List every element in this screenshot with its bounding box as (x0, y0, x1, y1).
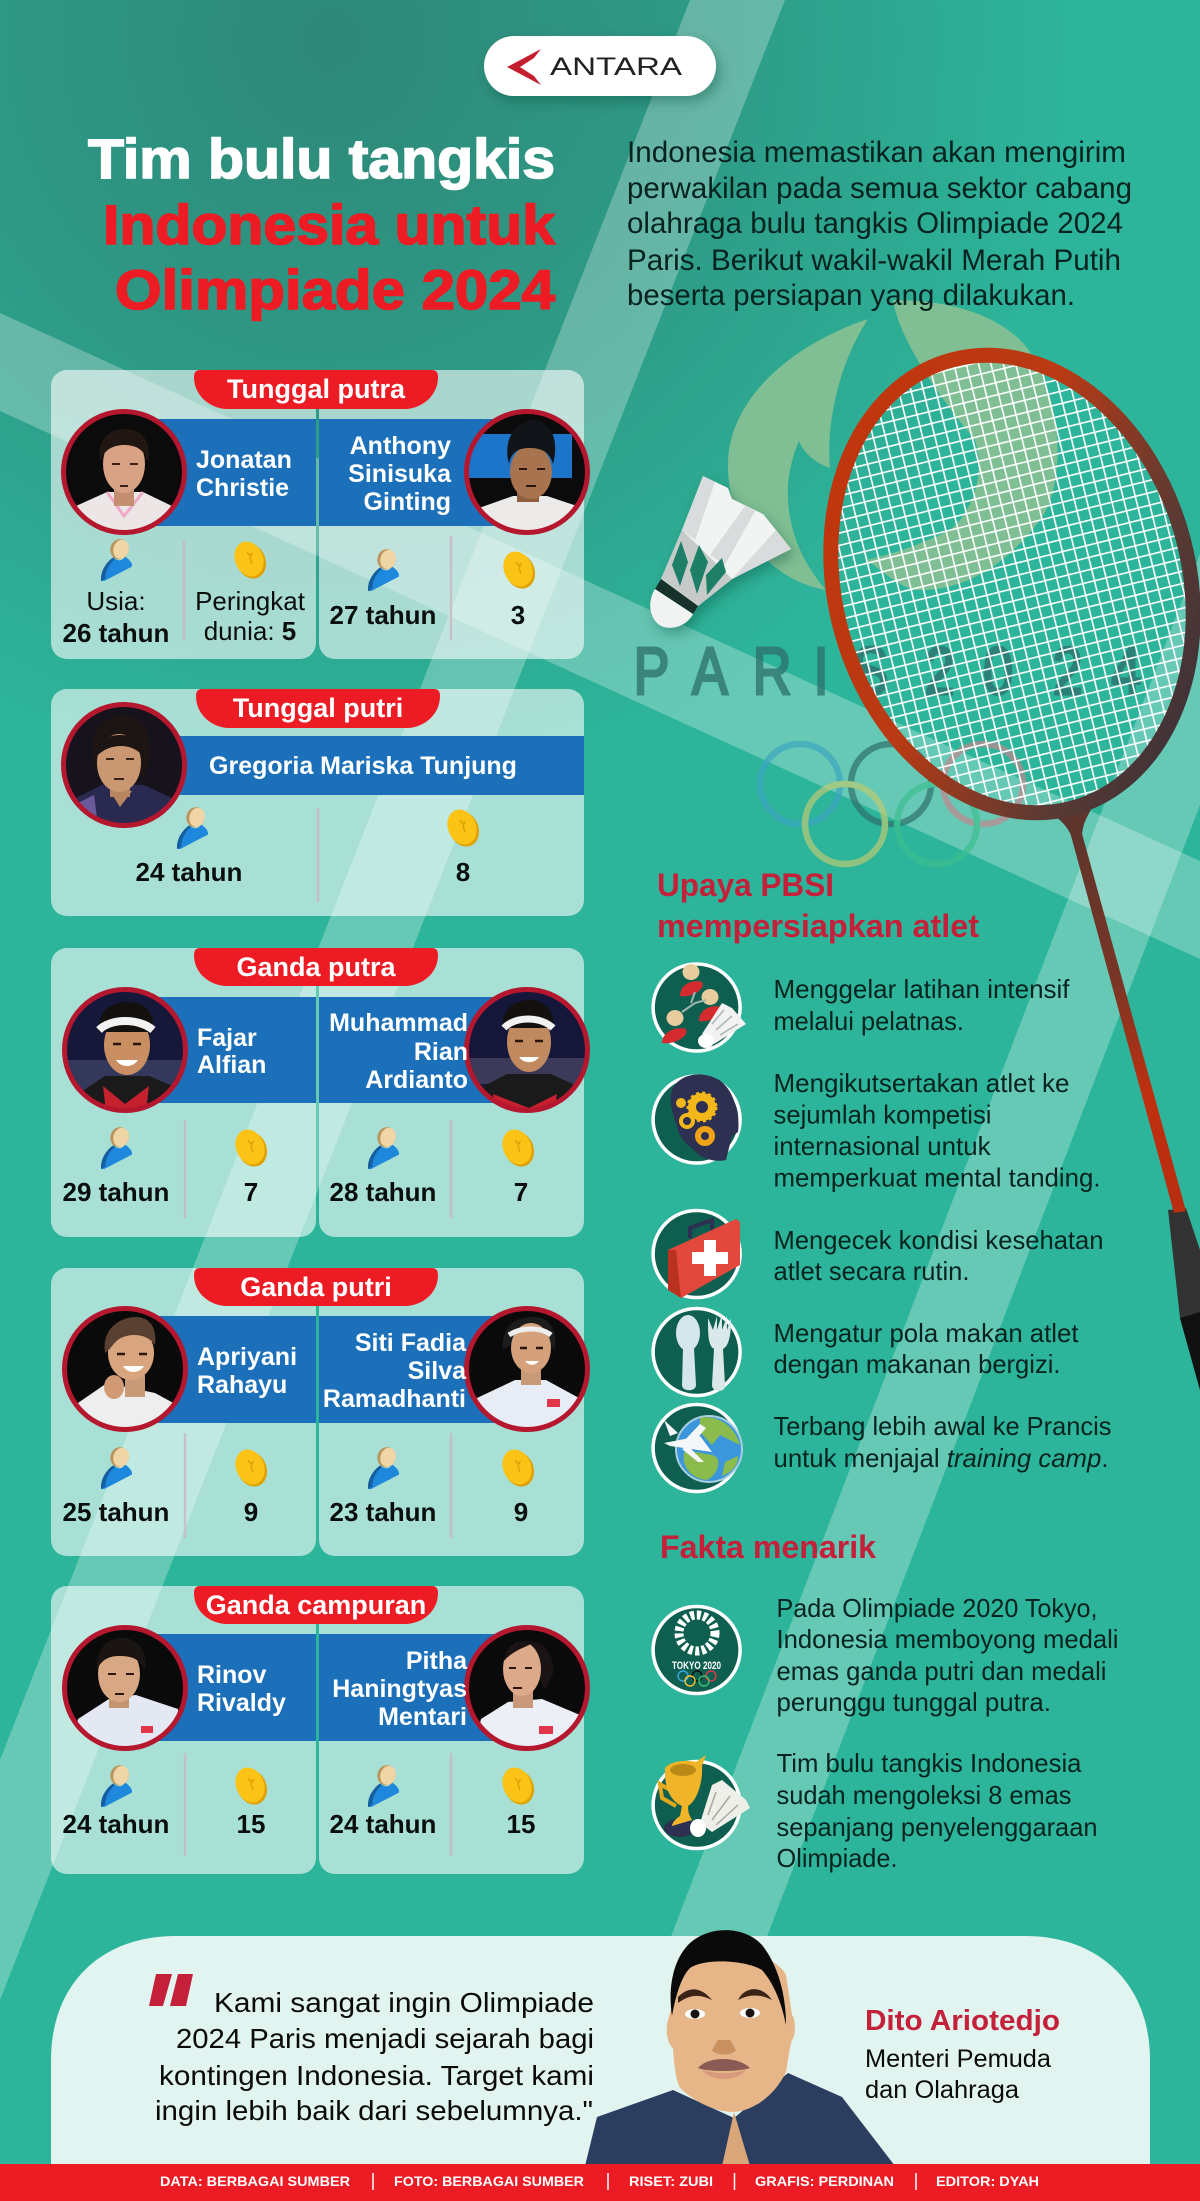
footer credits: EDITOR: DYAH (936, 2173, 1039, 2189)
text: travel: untuk menjajal training camp. (774, 1443, 1108, 1473)
name: Muhammad Rian Ardianto: Muhammad (329, 1009, 468, 1037)
portrait: Dito Ariotedjo (585, 1930, 895, 2166)
icon: trophy (653, 1755, 750, 1848)
name: Jonatan Christie: Jonatan (196, 446, 292, 474)
text: trophy fact (776, 1748, 1098, 1873)
name: Muhammad Rian Ardianto: Rian (414, 1038, 468, 1066)
intro text: beserta persiapan yang dilakukan. (627, 279, 1075, 312)
text: mental: Mengikutsertakan atlet ke (774, 1068, 1070, 1098)
icon: age (177, 805, 208, 849)
title: Olimpiade 2024 (115, 258, 555, 321)
text: nutrition (774, 1318, 1079, 1379)
icon: rank (230, 1445, 272, 1491)
intro text: Indonesia memastikan akan mengirim (627, 136, 1126, 169)
icon: age (101, 537, 132, 581)
pill: tunggal putri (196, 689, 440, 728)
intro text: perwakilan pada semua sektor cabang (627, 172, 1132, 205)
icon: rank (442, 805, 484, 851)
name: Fajar Alfian: Fajar (197, 1024, 257, 1052)
role: Menteri Pemuda (865, 2045, 1051, 2073)
panel: ganda campuran (51, 1586, 589, 1874)
rank: Fadia: 9 (514, 1497, 528, 1527)
text: travel: Terbang lebih awal ke Prancis (774, 1411, 1112, 1441)
pill: ganda putri: Ganda putri (240, 1272, 392, 1302)
name: Apriyani Rahayu (197, 1343, 297, 1399)
quote text: Kami sangat ingin Olimpiade (214, 1987, 594, 2018)
dividers (184, 536, 451, 640)
name: Pitha Haningtyas Mentari: Mentari (378, 1703, 467, 1731)
icon: nutrition (653, 1308, 740, 1396)
text: trophy fact: Tim bulu tangkis Indonesia (776, 1748, 1082, 1778)
age: Jonatan (63, 586, 169, 648)
text: trophy fact: sudah mengoleksi 8 emas (776, 1780, 1072, 1810)
paris flame emblem (728, 300, 1057, 590)
photo: Pitha Haningtyas Mentari (465, 1626, 589, 1758)
name: Muhammad Rian Ardianto: Ardianto (365, 1066, 468, 1094)
rank: Anthony: 3 (511, 600, 525, 630)
name: Muhammad Rian Ardianto (329, 1009, 468, 1094)
text: mental: memperkuat mental tanding. (774, 1162, 1100, 1192)
icon: age (368, 1125, 399, 1169)
icon: rank (230, 1125, 272, 1171)
pill: ganda putra (194, 948, 438, 986)
text: tokyo fact: Pada Olimpiade 2020 Tokyo, (776, 1593, 1098, 1623)
badminton racket (781, 314, 1200, 1390)
dividers (185, 1753, 451, 1856)
text: nutrition: Mengatur pola makan atlet (774, 1318, 1079, 1348)
intro text (627, 136, 1132, 312)
name: Siti Fadia Silva Ramadhanti: Siti Fadia (355, 1329, 467, 1357)
title: Indonesia untuk (103, 193, 556, 256)
heading: upaya pbsi: mempersiapkan atlet (657, 908, 979, 944)
name: Anthony Sinisuka Ginting: Ginting (364, 488, 451, 516)
name: Apriyani Rahayu: Rahayu (197, 1371, 287, 1399)
rank: Fajar: 7 (244, 1177, 258, 1207)
name: Pitha Haningtyas Mentari: Pitha (406, 1647, 468, 1675)
name: Jonatan Christie (196, 446, 292, 502)
icon: age (101, 1763, 132, 1807)
footer credits: DATA: BERBAGAI SUMBER (160, 2173, 350, 2189)
icon: mental (653, 1074, 740, 1163)
photo: Siti Fadia Silva Ramadhanti (465, 1307, 589, 1439)
age: Pitha: 24 tahun (330, 1809, 436, 1839)
rank: Pitha: 15 (507, 1809, 535, 1839)
name: Fajar Alfian: Alfian (197, 1051, 266, 1079)
name: Anthony Sinisuka Ginting: Sinisuka (348, 460, 452, 488)
pill: ganda campuran: Ganda campuran (206, 1590, 426, 1620)
logo mark (507, 49, 541, 85)
photo: Gregoria (62, 703, 186, 835)
photo: Muhammad Rian Ardianto (465, 988, 589, 1120)
pill: tunggal putra (194, 370, 438, 409)
text: training: Menggelar latihan intensif (774, 974, 1070, 1004)
text: nutrition: dengan makanan bergizi. (774, 1349, 1060, 1379)
heading: fakta menarik: Fakta menarik (660, 1529, 876, 1565)
icon: age (368, 547, 399, 591)
name: Rinov Rivaldy: Rivaldy (197, 1689, 286, 1717)
logo pill (484, 36, 716, 96)
name: Apriyani Rahayu: Apriyani (197, 1343, 297, 1371)
name: Rinov Rivaldy: Rinov (197, 1661, 267, 1689)
rank: Rian: 7 (514, 1177, 528, 1207)
role (865, 2045, 1051, 2104)
logo wordmark: ANTARA (550, 53, 682, 81)
intro text: olahraga bulu tangkis Olimpiade 2024 (627, 207, 1123, 240)
icon: age (101, 1125, 132, 1169)
icon: rank (497, 1445, 539, 1491)
text: trophy fact: Olimpiade. (776, 1843, 898, 1873)
icon: rank (498, 547, 540, 593)
dividers (185, 1433, 451, 1538)
rank: Rinov: 15 (237, 1809, 265, 1839)
icon: age (368, 1445, 399, 1489)
text: tokyo fact (776, 1593, 1118, 1717)
age: Fadia: 23 tahun (330, 1497, 436, 1527)
text: travel (774, 1411, 1112, 1473)
panel: ganda putra (51, 948, 589, 1237)
name: Siti Fadia Silva Ramadhanti (323, 1329, 467, 1413)
age: Fajar: 29 tahun (63, 1177, 169, 1207)
pill: ganda putra: Ganda putra (236, 952, 396, 982)
icon: tokyo 2020 (653, 1606, 740, 1694)
name: Gregoria Mariska Tunjung: Gregoria Mariska Tunjung (209, 752, 517, 780)
photo: Fajar Alfian (63, 988, 187, 1120)
text: mental: sejumlah kompetisi (774, 1100, 992, 1130)
rank: Apriyani: 9 (244, 1497, 258, 1527)
age: Rian: 28 tahun (330, 1177, 436, 1207)
text: health: Mengecek kondisi kesehatan (774, 1225, 1104, 1255)
heading: upaya pbsi (657, 867, 979, 944)
photo: Jonatan Christie (62, 410, 186, 542)
intro text: Paris. Berikut wakil-wakil Merah Putih (627, 244, 1121, 277)
title: Tim bulu tangkis (88, 127, 555, 190)
icon: training (653, 964, 746, 1051)
icon: rank (230, 1763, 272, 1809)
photo: Anthony Ginting (465, 410, 589, 542)
footer credits: RISET: ZUBI (629, 2173, 713, 2189)
panel: ganda putri (51, 1268, 589, 1556)
name: Siti Fadia Silva Ramadhanti: Ramadhanti (323, 1385, 466, 1413)
footer credits: FOTO: BERBAGAI SUMBER (394, 2173, 584, 2189)
quote text: kontingen Indonesia. Target kami (159, 2060, 594, 2091)
name: Rinov Rivaldy (197, 1661, 286, 1717)
footer credits: GRAFIS: PERDINAN (755, 2173, 894, 2189)
rank: Jonatan (195, 586, 306, 646)
age: Rinov: 24 tahun (63, 1809, 169, 1839)
text: mental: internasional untuk (774, 1131, 991, 1161)
icon: rank (497, 1763, 539, 1809)
name: Anthony Sinisuka Ginting (348, 432, 452, 516)
text: tokyo fact: perunggu tunggal putra. (776, 1687, 1051, 1717)
name: Pitha Haningtyas Mentari (332, 1647, 468, 1731)
quote text (155, 1987, 594, 2126)
age: Jonatan: Usia: (86, 586, 146, 616)
icon: rank (497, 1125, 539, 1171)
age: 24 tahun (136, 857, 242, 887)
text: training: melalui pelatnas. (774, 1006, 964, 1036)
age: Anthony: 27 tahun (330, 600, 436, 630)
text: tokyo fact: emas ganda putri dan medali (776, 1656, 1106, 1686)
name: Jonatan Christie: Christie (196, 474, 289, 502)
text: tokyo fact: Indonesia memboyong medali (776, 1624, 1118, 1654)
quote text: 2024 Paris menjadi sejarah bagi (176, 2023, 594, 2054)
name: Siti Fadia Silva Ramadhanti: Silva (408, 1357, 467, 1385)
role: dan Olahraga (865, 2076, 1019, 2104)
dividers (185, 1120, 451, 1218)
shuttlecock (650, 476, 791, 628)
age: Jonatan: 26 tahun (63, 618, 169, 648)
age: Apriyani: 25 tahun (63, 1497, 169, 1527)
name: Fajar Alfian (197, 1024, 266, 1079)
icon: rank (229, 537, 271, 583)
pill: tunggal putra: Tunggal putra (227, 374, 406, 404)
text: mental (774, 1068, 1100, 1192)
icon: travel (653, 1404, 742, 1492)
quote mark (149, 1974, 193, 2006)
photo: Rinov Rivaldy (63, 1626, 187, 1758)
panel: quote (51, 1930, 1150, 2166)
rank: 8 (456, 857, 470, 887)
footer credits (0, 2164, 1200, 2201)
icon: age (101, 1445, 132, 1489)
text: training (774, 974, 1070, 1036)
pill: ganda putri (194, 1268, 438, 1306)
name: Pitha Haningtyas Mentari: Haningtyas (332, 1675, 467, 1703)
divider (317, 808, 319, 902)
name: Dito Ariotedjo: Dito Ariotedjo (865, 2005, 1060, 2037)
quote text: ingin lebih baik dari sebelumnya." (155, 2095, 593, 2126)
text: health: atlet secara rutin. (774, 1256, 970, 1286)
rank: Jonatan: dunia: 5 (204, 616, 296, 646)
title (88, 127, 556, 321)
name: Anthony Sinisuka Ginting: Anthony (350, 432, 451, 460)
photo: Apriyani Rahayu (63, 1307, 187, 1439)
rank: Jonatan: Peringkat (195, 586, 306, 616)
panel: tunggal putra (51, 370, 589, 659)
pill: tunggal putri: Tunggal putri (233, 693, 403, 723)
heading: upaya pbsi: Upaya PBSI (657, 867, 834, 903)
panel: tunggal putri (51, 689, 584, 916)
text: health (774, 1225, 1104, 1286)
olympic rings (760, 744, 1023, 864)
text: trophy fact: sepanjang penyelenggaraan (776, 1812, 1098, 1842)
icon: age (368, 1763, 399, 1807)
icon: health (653, 1210, 740, 1298)
paris 2024 wordmark: PARIS 2024 (634, 633, 1141, 708)
icon: tokyo 2020: TOKYO 2020 (672, 1660, 721, 1672)
